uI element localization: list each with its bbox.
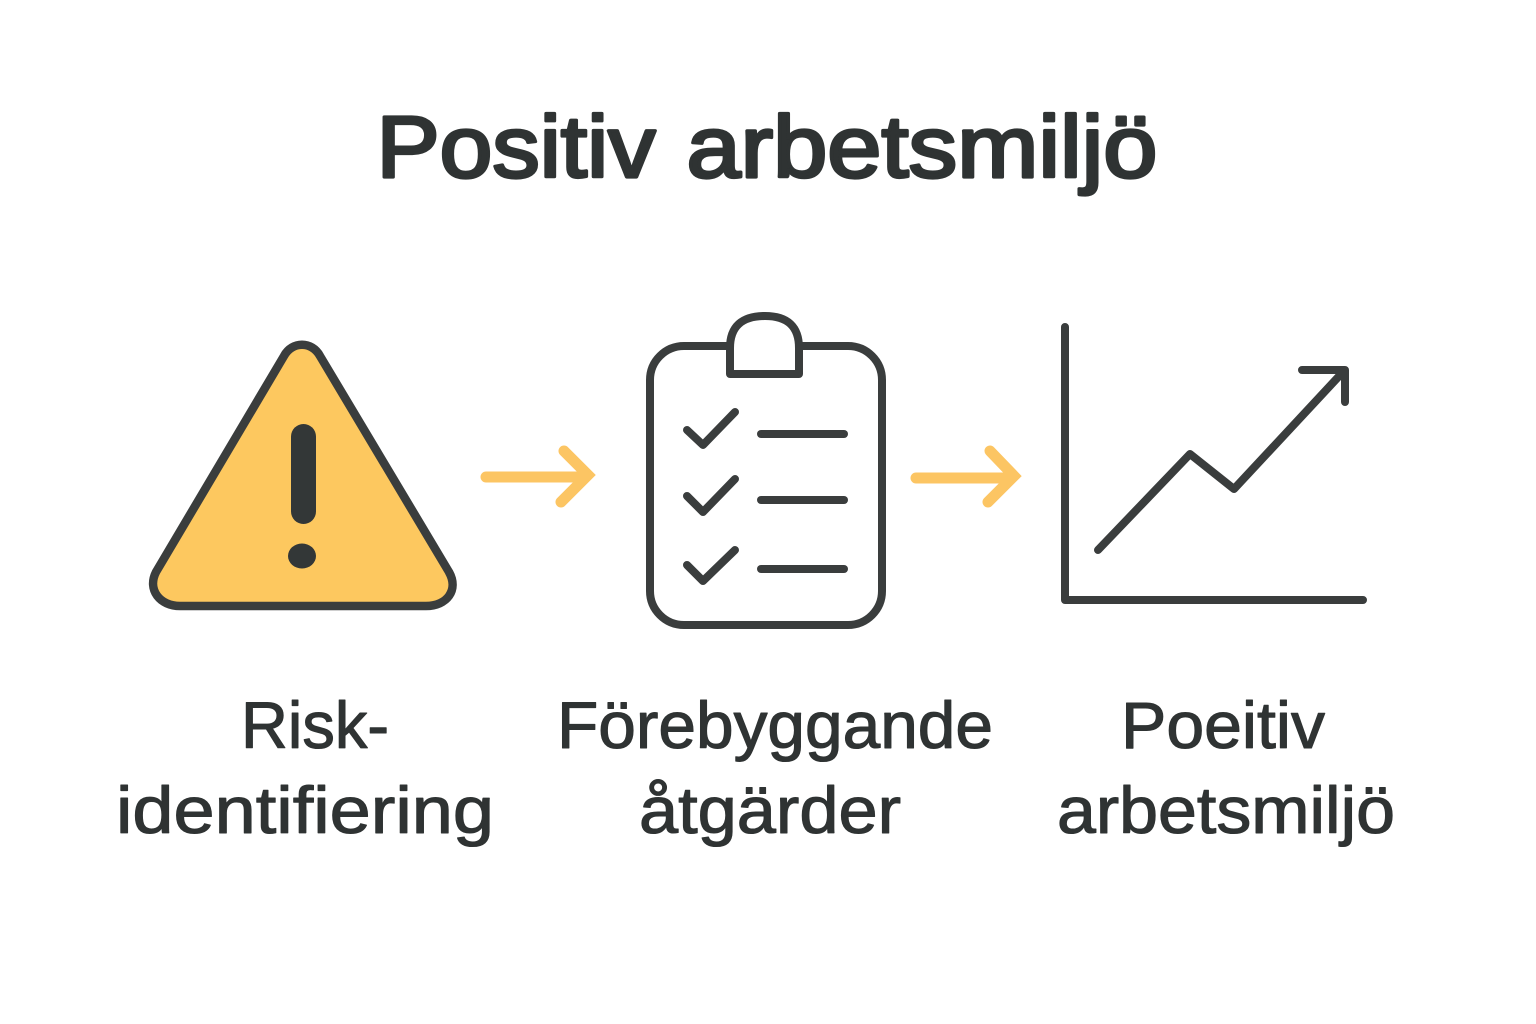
icon: clipboard checklist — [650, 316, 882, 625]
label: preventive measures — [557, 688, 993, 847]
arrow: risk to measures — [486, 451, 588, 502]
title: arbetsmiljö — [686, 99, 1158, 196]
title: Positiv — [376, 99, 656, 196]
label: risk identification: Risk- — [241, 688, 389, 762]
label: positive work environment: arbetsmiljö — [1057, 773, 1395, 847]
label: preventive measures: Förebyggande — [557, 688, 993, 762]
title — [376, 99, 1158, 196]
label: positive work environment — [1057, 688, 1395, 847]
label: risk identification: identifiering — [116, 773, 494, 847]
label: preventive measures: åtgärder — [639, 773, 901, 847]
label: positive work environment: Poeitiv — [1121, 688, 1325, 762]
icon: warning triangle — [153, 345, 453, 606]
icon: rising line chart — [1065, 327, 1363, 600]
arrow: measures to outcome — [916, 451, 1014, 502]
label: risk identification — [116, 688, 494, 847]
